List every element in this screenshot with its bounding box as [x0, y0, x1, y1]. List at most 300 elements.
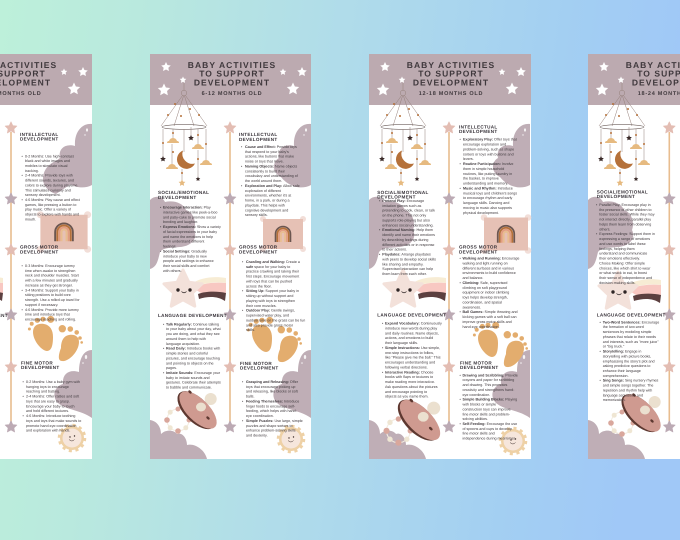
section: gross motor development: coordination, and spatial [462, 300, 502, 304]
section: language development: Talk Regularly: [166, 322, 192, 326]
section: gross motor development: • [22, 308, 24, 312]
section: social/emotional development: their sense of independence and [599, 276, 652, 280]
section: intellectual development: games, like pressing a button to [25, 203, 76, 207]
section: social/emotional development: by describing feelings during [382, 238, 428, 242]
section: fine motor development: Encourage the use [487, 422, 517, 426]
icon: baby feet [473, 322, 528, 367]
section: social/emotional development: feelings. [163, 245, 177, 249]
section: social/emotional development: • [379, 228, 381, 232]
section: language development: sentences by modeling simple [603, 330, 651, 334]
section: gross motor development: hand-eye coordination. [462, 325, 500, 329]
section: social/emotional development: introduce your baby to new [163, 254, 207, 258]
section: social/emotional development: • [596, 203, 598, 207]
section: gross motor development: • [460, 257, 462, 261]
section: gross motor development: different surfaces and in various [462, 266, 514, 270]
section: language development: simple stories and colorful [166, 352, 208, 356]
section: intellectual development [20, 132, 80, 221]
section: gross motor development: skills. [246, 328, 255, 332]
section: intellectual development: 0-2 Months: Use high-contrast [25, 154, 74, 158]
section: gross motor development: sitting up without support and [246, 294, 293, 298]
icon: rainbow pillow [37, 211, 91, 253]
section: gross motor development: GROSS MOTOR [20, 244, 59, 250]
section: fine motor development: 2-4 Months: Offer rattles and soft [26, 395, 79, 399]
section: gross motor development: Sitting Up: [246, 289, 264, 293]
section: intellectual development: actions, like buttons that make [245, 155, 294, 159]
section: language development: language acquisition and [603, 393, 643, 397]
section: fine motor development: • [460, 373, 462, 377]
icon: star with trail [164, 270, 226, 306]
section: language development: and interests, such as "more juice" [603, 340, 659, 344]
section: fine motor development: construction toys can improve [462, 407, 511, 411]
section: fine motor development: feeding, which helps with hand- [246, 409, 298, 413]
section: language development: and encourage pointing to [385, 390, 427, 394]
section: intellectual development: Introduce [498, 186, 513, 190]
section: fine motor development: and releasing, like blocks or soft [246, 390, 298, 394]
section: gross motor development: 3-4 Months: Support your baby in [25, 288, 79, 292]
section: gross motor development: DEVELOPMENT [20, 249, 58, 254]
section: intellectual development: Routine Participation: [463, 162, 501, 166]
section: social/emotional development: DEVELOPMENT [377, 194, 416, 200]
header: 18-24 months [588, 54, 680, 105]
section: social/emotional development: pretending to cook, clean, or talk [382, 209, 435, 213]
section: language development: one-step instructions to follow, [385, 351, 434, 355]
section: fine motor development: toys and toys that make sounds to [26, 419, 81, 423]
section: language development: repetition and rhythm help with [603, 388, 652, 392]
section: gross motor development: safe space for your baby to [246, 265, 290, 269]
section: gross motor development: GROSS MOTOR [239, 244, 278, 250]
section: fine motor development: DEVELOPMENT [460, 365, 498, 370]
section: social/emotional development: Supervised interaction can help [382, 267, 433, 271]
section: language development: around them to help with [166, 337, 206, 341]
section: fine motor development: DEVELOPMENT [21, 365, 60, 370]
section: social/emotional development: people and settings to enhance [163, 259, 214, 263]
section: fine motor development: solving abilities. [462, 417, 488, 421]
section: language development: Engage in [625, 350, 641, 354]
section: gross motor development: with a few minutes and gradually [25, 279, 78, 283]
section: language development: baby to imitate sounds and [166, 376, 210, 380]
section: intellectual development: playdate. This helps with [245, 203, 285, 207]
section: fine motor development [21, 360, 81, 433]
section: social/emotional development: foster social skills. While they may [599, 213, 655, 217]
section: language development: phrases that relate to their needs [603, 335, 656, 339]
section: language development: to your baby about your day, what [166, 327, 221, 331]
section: language development: • [382, 346, 384, 350]
section: intellectual development: vocabulary and understanding of [245, 174, 299, 178]
section: language development: Imitate Sounds: [166, 371, 193, 375]
section: social/emotional development: them learn from each other. [382, 272, 427, 276]
section: intellectual development: the basket, to improve [463, 177, 499, 181]
section: gross motor development: Outdoor Play: [246, 309, 270, 313]
section: gross motor development: and balance. [462, 276, 483, 280]
header: 6-12 months: BABY ACTIVITIES [188, 60, 276, 70]
section: gross motor development: time when awake to strengthen [25, 269, 75, 273]
section: gross motor development: their core muscles. [246, 304, 277, 308]
section: social/emotional development: Social Settings: [163, 249, 190, 253]
section: fine motor development: Offer [290, 380, 298, 384]
section: intellectual development: INTELLECTUAL [239, 132, 278, 137]
section: social/emotional development: Express Feelings: Support them in [599, 232, 655, 236]
section: fine motor development: • [242, 380, 244, 384]
section: social/emotional development: feelings, helping them [599, 247, 635, 251]
section: language development: comprehension. [603, 374, 629, 378]
section: fine motor development [240, 361, 303, 438]
section: intellectual development: • [241, 145, 243, 149]
icon: pacifier [164, 385, 223, 436]
section: intellectual development: INTELLECTUAL [20, 132, 59, 137]
section: social/emotional development: identify and name their emotions [382, 233, 435, 237]
section: language development: Interactive Reading: [385, 370, 420, 374]
section: intellectual development: to encourage rhythm and early [463, 196, 513, 200]
section: intellectual development: mobiles to stimulate visual [25, 164, 68, 168]
section: fine motor development: Use large, simple [275, 419, 303, 423]
section: gross motor development: • [22, 288, 24, 292]
section: language development [158, 313, 227, 390]
section: intellectual development: Naming Objects: [245, 164, 274, 168]
section: fine motor development: eye coordination. [246, 414, 274, 418]
section: gross motor development: 0-3 Months: Encourage tummy [25, 264, 75, 268]
section: social/emotional development: helps them learn from observing [599, 222, 651, 226]
section: intellectual development: tracking. [25, 169, 39, 173]
header: 12-18 months: TO SUPPORT [418, 69, 484, 79]
section: social/emotional development: with peers to develop social skills [382, 257, 436, 261]
section: social/emotional development: SOCIAL/EMOTIONAL [158, 190, 209, 195]
section: gross motor development: • [242, 309, 244, 313]
section: social/emotional development: SOCIAL/EMOTIONAL [597, 190, 648, 194]
section: language development: emphasizing the story's plot and [603, 359, 655, 363]
section: social/emotional development [158, 190, 221, 273]
section: intellectual development: Provide toys [277, 145, 297, 149]
section: language development: enhance their language [603, 369, 641, 373]
section: social/emotional development: Pretend Play: [382, 199, 406, 203]
section: intellectual development: cognitive development and [245, 208, 288, 212]
section: language development: Expand Vocabulary: [385, 322, 420, 326]
section: gross motor development: equipment or indoor climbing [462, 291, 509, 295]
section: gross motor development: sitting positions to build core [25, 293, 71, 297]
section: fine motor development: • [22, 395, 24, 399]
section: gross motor development: across the floor. [246, 284, 272, 288]
section: intellectual development: them in simple household [463, 167, 504, 171]
section: social/emotional development: Emotional Naming: [382, 228, 415, 232]
section: intellectual development: play music. Offer a variety of [25, 208, 72, 212]
section: social/emotional development: different activities or in response [382, 243, 434, 247]
section: social/emotional development: • [160, 225, 162, 229]
section: intellectual development: different sounds, textures, and [25, 179, 74, 183]
section: fine motor development: • [22, 414, 24, 418]
section: social/emotional development: with others. [163, 269, 182, 273]
section: fine motor development: of spoons and cups to develop [462, 427, 512, 431]
section: language development: • [600, 350, 602, 354]
section: language development: language acquisition. [166, 342, 200, 346]
section: fine motor development: • [242, 419, 244, 423]
section: gross motor development [20, 244, 80, 322]
section: social/emotional development: understand and communicate [599, 252, 647, 256]
section: intellectual development: sensory skills. [245, 213, 268, 217]
section: intellectual development: Name objects [275, 164, 297, 168]
section: intellectual development: DEVELOPMENT [239, 137, 278, 142]
section: fine motor development: with blocks or simple [462, 403, 496, 407]
section: fine motor development: reaching and batting. [26, 390, 60, 394]
section: fine motor development: promote hand-eye coordination [26, 424, 76, 428]
section: fine motor development: creativity and strengthens hand- [462, 388, 515, 392]
panel: 18-24 months [588, 54, 680, 459]
header: 0-6 months [0, 54, 92, 105]
section: gross motor development: Encourage [502, 257, 519, 261]
icon: star with trail [0, 270, 3, 306]
section: language development: LANGUAGE DEVELOPMENT [158, 313, 227, 318]
section: intellectual development: understanding and memory. [463, 182, 508, 186]
section: language development: the formation of two-word [603, 325, 644, 329]
section: gross motor development: with toys that can be pushed [246, 279, 292, 283]
section: language development: Storytelling: [603, 350, 624, 354]
section: fine motor development: Provide [505, 373, 518, 377]
section: intellectual development: mouth. [25, 217, 36, 221]
section: gross motor development: Walking and Running: [462, 257, 501, 261]
section: social/emotional development: imitation games such as [382, 204, 422, 208]
section: social/emotional development: and use words to label these [599, 242, 646, 246]
section: fine motor development: toys that are easy to grasp. [26, 399, 70, 403]
section: language development: storytelling with picture books, [603, 354, 651, 358]
section: fine motor development: Drawing and Scribbling: [462, 373, 504, 377]
section: social/emotional development: Help them [416, 228, 433, 232]
blobs [369, 124, 530, 459]
icon: smiling sun [278, 426, 304, 452]
section: language development: LANGUAGE DEVELOPMENT [597, 312, 666, 318]
section: gross motor development: • [242, 289, 244, 293]
icon: baby feet [247, 317, 302, 362]
section: social/emotional development: bonding and laughter. [163, 220, 198, 224]
section: gross motor development: Crawling and Walking: [246, 260, 285, 264]
section: social/emotional development: their social skills and comfort [163, 264, 210, 268]
panel: 0-6 months [0, 54, 92, 459]
section: gross motor development: practice crawling and taking their [246, 270, 300, 274]
section: fine motor development: FINE MOTOR [21, 360, 53, 366]
section: language development: LANGUAGE DEVELOPMENT [377, 312, 446, 318]
section: social/emotional development: expressing a range of emotions [599, 237, 650, 241]
section: language development: • [163, 371, 165, 375]
timeline [5, 122, 17, 432]
section: intellectual development: environments, whether it's at [245, 194, 291, 198]
icon: pacifier [383, 393, 447, 448]
section: social/emotional development: Encourage Interaction: [163, 206, 203, 210]
section: intellectual development: consistently to build their [245, 169, 286, 173]
section: fine motor development [460, 360, 518, 441]
section: language development: objects as you name them. [385, 395, 429, 399]
section: language development: Use simple, [421, 346, 440, 350]
section: gross motor development: Safe, supervised [480, 281, 507, 285]
icon: pacifier [608, 388, 667, 439]
section: intellectual development: language skills. Dancing and [463, 201, 509, 205]
section: social/emotional development: Playdates: [382, 253, 401, 257]
section: intellectual development: Cause and Effect: [245, 145, 276, 149]
section: language development: asking predictive questions to [603, 364, 650, 368]
section: intellectual development: Exploration and Play: [245, 184, 282, 188]
section: intellectual development: levers. [463, 157, 474, 161]
section: intellectual development: Music and Rhythm: [463, 186, 497, 190]
section: gross motor development: • [460, 310, 462, 314]
section: fine motor development: FINE MOTOR [460, 360, 492, 366]
section: fine motor development: Feeding Themselves: [246, 399, 283, 403]
icon: smiling sun [500, 428, 526, 454]
section: intellectual development: black and white images and [25, 159, 70, 163]
section: fine motor development: 4-6 Months: Introduce teething [26, 414, 75, 418]
section: fine motor development: and drawing. This promotes [462, 383, 508, 387]
section: language development: Simple Instructions: [385, 346, 420, 350]
section: language development: encourages understanding and [385, 361, 435, 365]
section: language development: pictures, and encourage touching [166, 356, 220, 360]
header: 12-18 months: DEVELOPMENT [413, 77, 489, 87]
timeline [224, 122, 236, 432]
section: intellectual development: objects to explore with hands and [25, 212, 79, 216]
section: language development: Encourage [642, 320, 659, 324]
section: social/emotional development: DEVELOPMENT [158, 195, 196, 200]
section: gross motor development: playing with toys to strengthen [246, 299, 295, 303]
section: social/emotional development: Encourage [407, 199, 424, 203]
section: intellectual development: 2-4 Months: Provide toys with [25, 174, 73, 178]
section: gross motor development [459, 244, 519, 329]
section: intellectual development: sensory development. [25, 193, 61, 197]
section: fine motor development: and exploration with hands. [26, 429, 70, 433]
section: intellectual development: • [460, 162, 462, 166]
section: social/emotional development: Parallel Play: Encourage play in [599, 203, 651, 207]
section: language development: like "Please give me the ball." This [385, 356, 441, 360]
section: fine motor development: DEVELOPMENT [240, 366, 278, 370]
icon: rainbow pillow [260, 216, 306, 252]
section: intellectual development: musical toys and children's songs [463, 191, 517, 195]
section: language development: their language skills. [385, 341, 418, 345]
section: social/emotional development: the presence of other children to [599, 208, 652, 212]
section: gross motor development: climbing on soft playground [462, 286, 507, 290]
section: intellectual development: Allow safe [283, 184, 300, 188]
section: social/emotional development [377, 190, 436, 276]
section: fine motor development: hanging toys to encourage [26, 385, 69, 389]
header: 12-18 months: 12-18 MONTHS OLD [419, 91, 483, 97]
section: gross motor development: improve gross motor skills and [462, 320, 512, 324]
header: 6-12 months: DEVELOPMENT [194, 77, 270, 87]
section: language development: memorization. [603, 398, 626, 402]
section: language development: Encourage your [194, 371, 220, 375]
section: gross motor development: environments to build confidence [462, 271, 516, 275]
section: intellectual development: Offer toys that [494, 138, 517, 142]
icon: smiling sun [60, 426, 84, 450]
icon: baby feet [28, 316, 83, 361]
section: intellectual development: exploration of different [245, 189, 281, 193]
section: language development [377, 312, 446, 399]
section: fine motor development: Playing [505, 398, 517, 402]
section: social/emotional development: of facial expressions to your baby [163, 230, 217, 234]
section: social/emotional development: others. [599, 227, 610, 231]
section: fine motor development: Simple Puzzles: [246, 419, 274, 423]
section: fine motor development: • [22, 380, 24, 384]
section: language development: following verbal directions. [385, 365, 428, 369]
section: gross motor development: toys helps develop strength, [462, 296, 508, 300]
section: language development: Introduce books with [187, 347, 220, 351]
section: fine motor development: Encourage your baby to touch [26, 404, 75, 408]
section: gross motor development: and also provide gross motor [246, 323, 294, 327]
section: language development: • [163, 322, 165, 326]
section: gross motor development: • [460, 281, 462, 285]
section: language development: • [382, 322, 384, 326]
section: language development: and daily routines. Name objects, [385, 331, 439, 335]
header: 6-12 months: 6-12 MONTHS OLD [202, 91, 262, 97]
section: language development: and simple songs together. The [603, 384, 653, 388]
section: fine motor development: fine motor skills and [462, 432, 495, 436]
section: fine motor development: Grasping and Releasing: [246, 380, 289, 384]
header: 6-12 months: TO SUPPORT [199, 69, 265, 79]
section: gross motor development: 4-6 Months: Provide more tummy [25, 308, 79, 312]
section: language development [597, 312, 666, 402]
section: language development: Continuously [421, 322, 442, 326]
header: 6-12 months [150, 54, 311, 105]
section: social/emotional development: Play [204, 206, 211, 210]
header: 12-18 months [369, 54, 531, 105]
section: language development: Choose [421, 370, 433, 374]
section: social/emotional development: Arrange playdates [401, 253, 431, 257]
section: intellectual development: 4-6 Months: Play cause and effect [25, 198, 80, 202]
section: fine motor development: puzzles and shape sorters to [246, 424, 293, 428]
section: gross motor development: support if necessary. [25, 303, 58, 307]
section: social/emotional development: • [160, 249, 162, 253]
blobs [150, 124, 311, 459]
section: language development: Read Daily: [166, 347, 186, 351]
blobs [43, 124, 92, 418]
section: intellectual development: sorters or toys with buttons and [463, 152, 514, 156]
section: social/emotional development: on the phone. This not only [382, 214, 426, 218]
section: social/emotional development: Gradually [191, 249, 207, 253]
section: gross motor development: GROSS MOTOR [459, 244, 498, 250]
section: intellectual development: home, in a park, or during a [245, 199, 290, 203]
section: language development: and pointing to objects on the [166, 361, 214, 365]
section: intellectual development [459, 124, 517, 215]
icon: baby mobile [379, 83, 431, 186]
panel: 6-12 months [150, 54, 311, 459]
section: language development: or "big truck." [603, 345, 625, 349]
section: fine motor development: • [242, 399, 244, 403]
section: gross motor development: Support your baby in [265, 289, 299, 293]
section: fine motor development: balls. [246, 395, 254, 399]
section: intellectual development: that respond to your baby's [245, 150, 289, 154]
section: fine motor development: and hold different textures. [26, 409, 69, 413]
section: gross motor development: supervised water play, and [246, 314, 289, 318]
section: intellectual development: • [241, 184, 243, 188]
section: gross motor development: walking and light running on [462, 261, 508, 265]
section: social/emotional development: Express Emotions: [163, 225, 196, 229]
section: language development: books with flaps or textures to [385, 375, 433, 379]
section: language development: pages. [166, 366, 177, 370]
section: social/emotional development [596, 190, 655, 285]
section: social/emotional development: them understand different [163, 240, 204, 244]
section: fine motor development: finger foods to encourage self- [246, 404, 296, 408]
section: gross motor development: Create a [286, 260, 300, 264]
section: gross motor development: strength. Use a rolled-up towel for [25, 298, 80, 302]
section: social/emotional development: not interact directly, parallel play [599, 218, 651, 222]
section: fine motor development: 0-2 Months: Use a baby gym with [26, 380, 80, 384]
section: intellectual development: • [241, 164, 243, 168]
section: social/emotional development: SOCIAL/EMOTIONAL [377, 190, 429, 195]
section: language development: gestures. Celebrate their attempts [166, 381, 221, 385]
icon: star with trail [384, 270, 446, 306]
section: fine motor development: • [460, 422, 462, 426]
section: fine motor development: eye coordination. [462, 393, 490, 397]
section: gross motor development [239, 244, 305, 332]
section: intellectual development: DEVELOPMENT [20, 137, 58, 142]
section: intellectual development: • [22, 198, 24, 202]
section: intellectual development: problem-solving, such as shape [463, 147, 514, 151]
section: fine motor development: Simple Building Blocks: [462, 398, 504, 402]
section: gross motor development: Climbing: [462, 281, 479, 285]
section: social/emotional development: and name the emotions to help [163, 235, 213, 239]
section: intellectual development [239, 132, 300, 217]
section: intellectual development: physical development. [463, 211, 499, 215]
